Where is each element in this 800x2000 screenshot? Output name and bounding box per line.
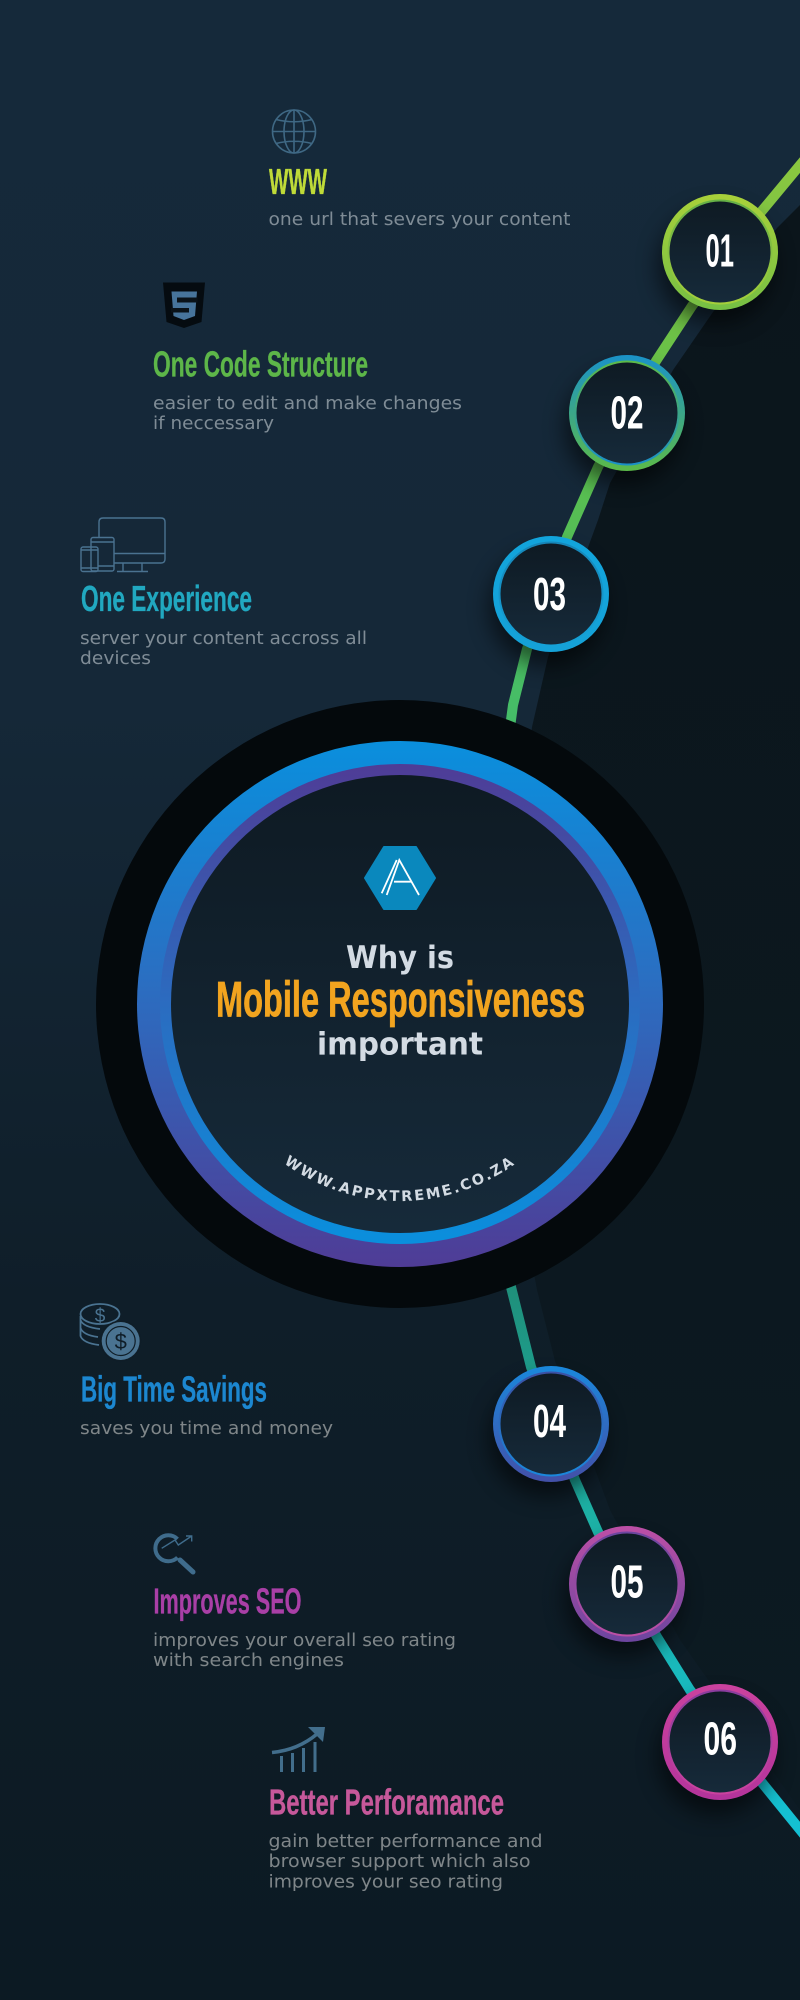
text: improves overall: improves your overall seo rating: [153, 1631, 456, 1651]
heading: Big Time Savings: Big Time Savings: [81, 1368, 267, 1410]
node 03: [489, 536, 609, 666]
heading: Improves SEO: Improves SEO: [154, 1580, 302, 1622]
text: saves you time: saves you time and money: [80, 1419, 333, 1439]
dark shaded area right of the path: [522, 205, 800, 1810]
heading: WWW: WWW: [269, 161, 327, 202]
text: improves overall: [153, 1631, 456, 1671]
text: improves overall: with search engines: [153, 1651, 344, 1671]
text: gain better: gain better performance and: [268, 1832, 542, 1852]
heading: One Experience: One Experience: [81, 578, 252, 619]
icon: globe: [272, 110, 316, 153]
icon: devices: [81, 518, 165, 572]
step 04 item: [80, 1304, 333, 1439]
node 03: 03: [533, 568, 566, 620]
step 06 item: [268, 1727, 542, 1892]
node 05: [565, 1526, 685, 1656]
heading: Better Perforamance: Better Perforamance: [269, 1782, 504, 1822]
icon: seo magnifier: [155, 1535, 193, 1572]
node 01: 01: [706, 224, 734, 276]
text: gain better: improves your seo rating: [268, 1872, 503, 1892]
heading: One Code Structure: One Code Structure: [153, 344, 368, 384]
icon: growth chart: [272, 1727, 325, 1772]
step 05 item: [153, 1535, 456, 1671]
title: Why is: Why is: [346, 940, 454, 976]
title: Mobile Responsiveness: Mobile Responsiveness: [216, 972, 585, 1028]
text: easier to edit: [153, 394, 462, 434]
step 01 item: [268, 110, 571, 230]
text: server your content: [80, 629, 367, 669]
text: one url: one url that severs your content: [268, 210, 571, 230]
icon: html5 shield: [163, 282, 205, 328]
step 03 item: [80, 518, 367, 669]
text: easier to edit: easier to edit and make changes: [153, 394, 462, 414]
node 04: 04: [533, 1395, 566, 1447]
node 06: [658, 1684, 778, 1814]
node 01: [658, 194, 778, 324]
icon: coins: $: [115, 1329, 127, 1354]
title: important: important: [317, 1026, 483, 1062]
icon: coins: $: [95, 1306, 106, 1327]
outer black disc: [96, 700, 704, 1308]
icon: hexagon logo: [365, 847, 435, 909]
text: gain better: browser support which also: [268, 1852, 530, 1872]
curved url text: WWW.APPXTREME.CO.ZA: [286, 1154, 514, 1202]
node 06: 06: [704, 1712, 737, 1764]
node 02: [565, 355, 685, 485]
icon: coins: [80, 1304, 141, 1362]
text: server your content: devices: [80, 649, 151, 669]
node 02: 02: [610, 386, 644, 438]
connecting path line: [503, 153, 800, 1842]
node 05: 05: [610, 1556, 644, 1608]
text: gain better: [268, 1832, 542, 1892]
outer gradient ring: [137, 741, 663, 1267]
node 04: [489, 1366, 609, 1496]
central circle: [96, 700, 704, 1308]
text: easier to edit: if neccessary: [153, 414, 274, 434]
step 02 item: [153, 282, 462, 434]
inner gradient ring: [160, 764, 640, 1244]
text: server your content: server your content accross all: [80, 629, 367, 649]
inner disc: [171, 775, 629, 1233]
